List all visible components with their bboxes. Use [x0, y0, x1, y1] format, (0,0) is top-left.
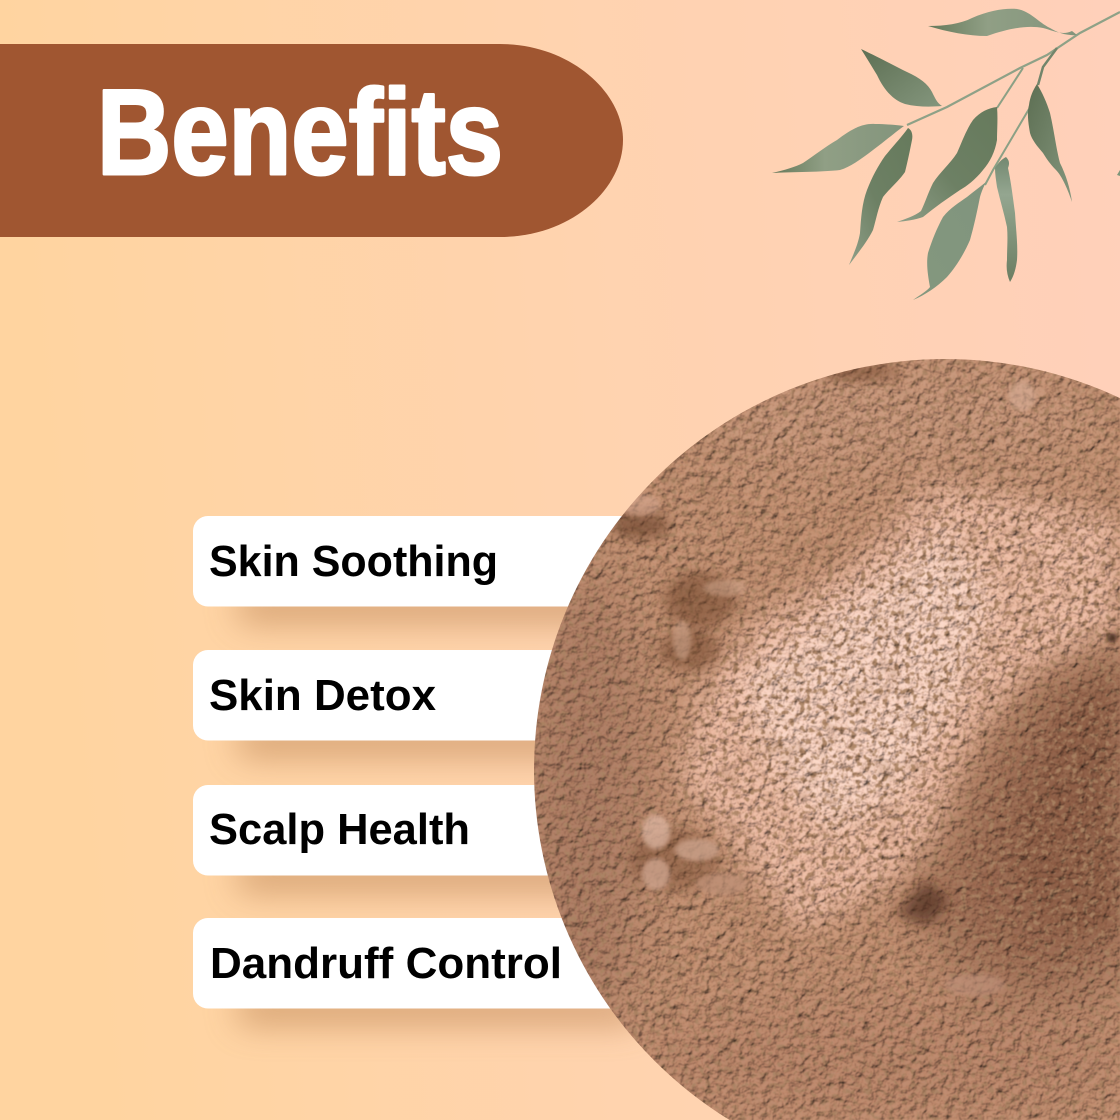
benefit: skin detox	[193, 650, 653, 740]
benefit: scalp health: Scalp Health	[209, 805, 470, 854]
shadow: skin detox pill	[238, 726, 638, 756]
benefit: skin soothing	[193, 516, 653, 606]
clump: left of mound	[610, 364, 1035, 670]
benefit: scalp health	[193, 785, 653, 876]
benefit: skin detox: Skin Detox	[209, 671, 437, 720]
clump: lower mound	[630, 815, 1005, 996]
title banner	[0, 44, 623, 237]
shadow: dandruff control pill	[238, 994, 638, 1024]
benefit: dandruff control: Dandruff Control	[210, 939, 562, 988]
benefit: skin soothing: Skin Soothing	[209, 537, 498, 586]
benefit: dandruff control	[193, 918, 653, 1008]
shadow: scalp health pill	[238, 861, 638, 891]
icon: watercolour leaf branch	[772, 9, 1120, 300]
title: Benefits	[97, 64, 503, 200]
shadow: skin soothing pill	[238, 592, 638, 622]
photo: clay powder circle	[520, 350, 1120, 1120]
